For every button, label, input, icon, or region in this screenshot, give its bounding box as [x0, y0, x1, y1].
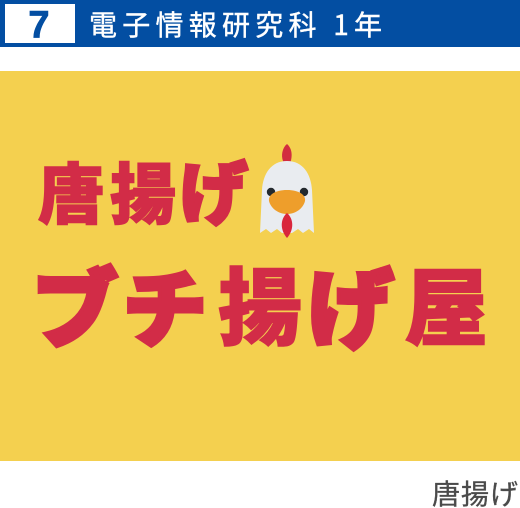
sign text: shop name: チ	[123, 244, 207, 365]
sign text: karaage: 揚	[110, 142, 176, 238]
sign text: shop name: ブ	[32, 240, 118, 365]
sign text: shop name: 屋	[404, 242, 488, 363]
number badge	[5, 4, 75, 46]
number badge: 7	[28, 4, 50, 46]
icon: chicken head	[260, 144, 314, 238]
photo panel: shop sign	[0, 71, 520, 461]
sign text: shop name: 揚	[218, 242, 302, 363]
sign text: shop name	[32, 240, 488, 365]
header bar	[0, 0, 520, 47]
sign text: karaage: げ	[180, 139, 248, 238]
sign text: karaage	[38, 139, 248, 238]
sign text: karaage: 唐	[38, 142, 104, 238]
header title: 電子情報研究科 1年	[89, 4, 382, 44]
sign text: shop name: げ	[308, 240, 394, 365]
